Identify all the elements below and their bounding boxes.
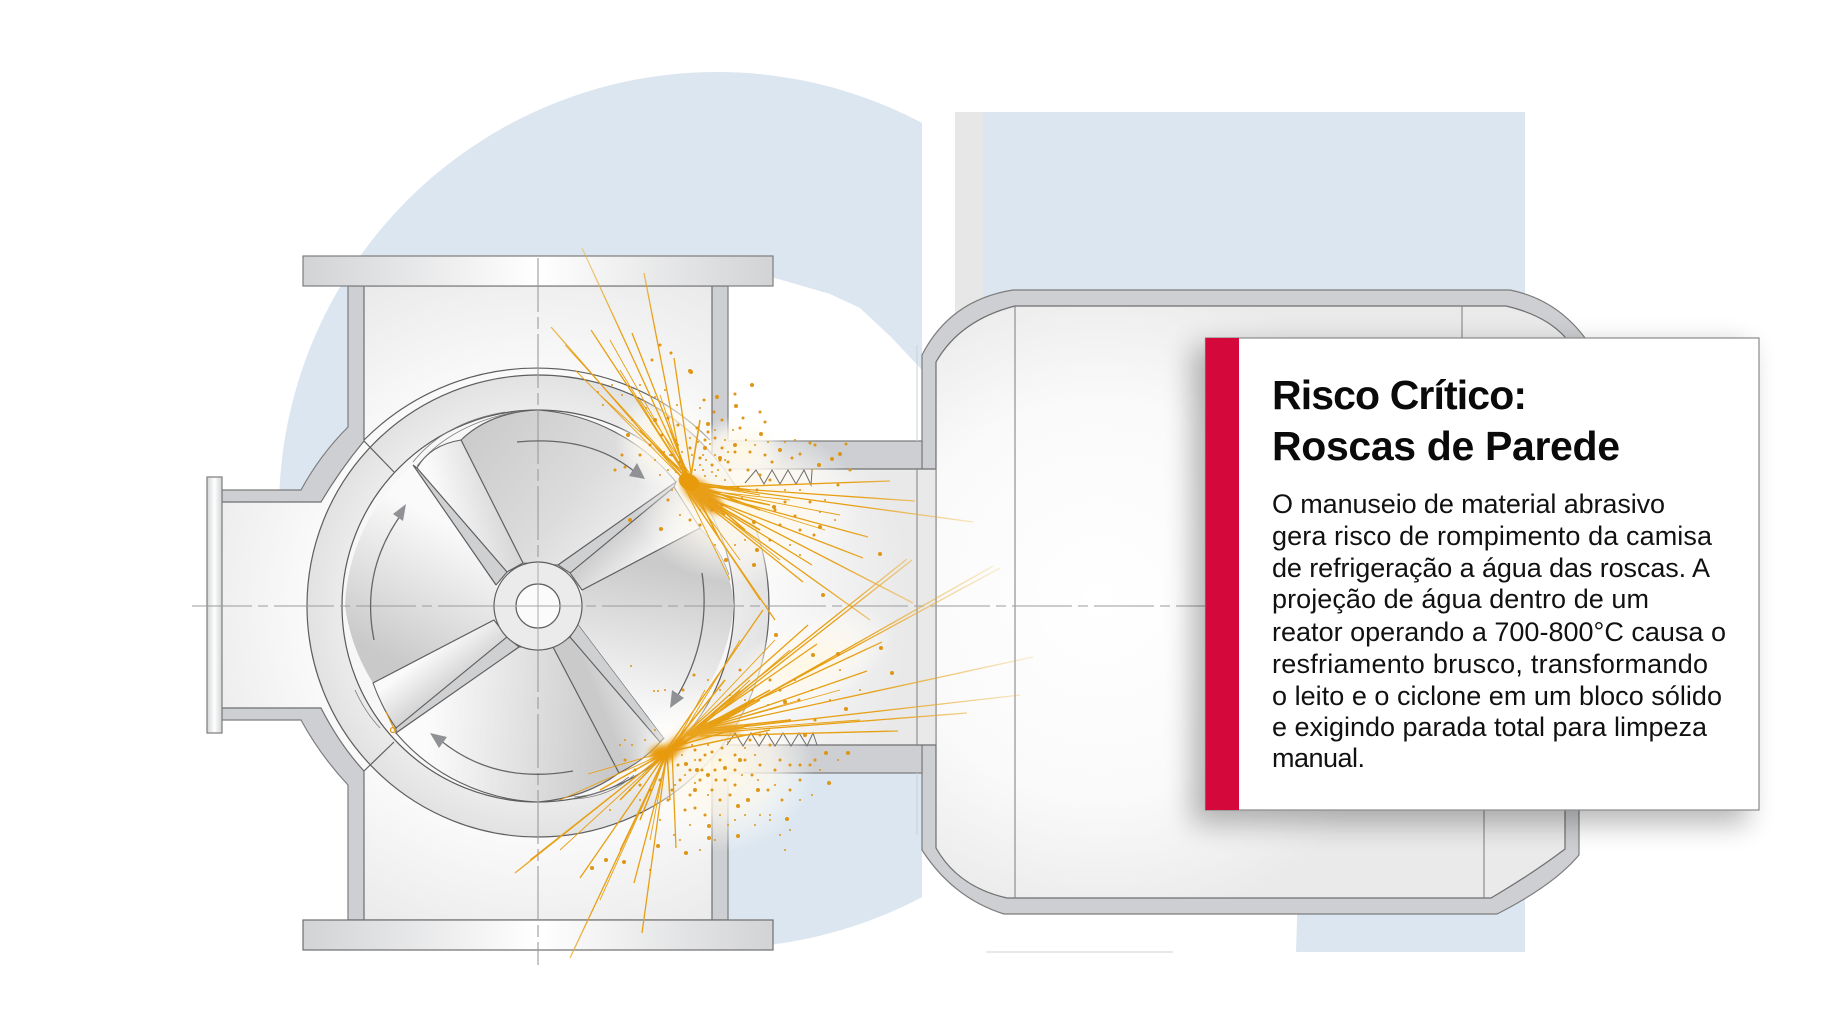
sparks: lower burst [515, 559, 1033, 958]
rotor casing rings [307, 368, 769, 837]
threads: wall thread zigzags [727, 470, 817, 746]
card body text [1272, 489, 1726, 773]
arrow: top [517, 441, 645, 479]
card body text: reator operando a 700-800°C causa o [1272, 617, 1726, 647]
background: blue circle shape [280, 72, 922, 944]
spark particles: left bearing spot [386, 712, 396, 733]
card body text: O manuseio de material abrasivo [1272, 489, 1665, 519]
background: blue rectangle block [955, 112, 1525, 953]
card heading: Risco Crítico: [1272, 372, 1527, 418]
spark particles: lower [592, 635, 892, 870]
rotation arrows [371, 441, 704, 774]
card body text: de refrigeração a água das roscas. A [1272, 553, 1710, 583]
flange: bottom [303, 920, 773, 950]
infographic canvas [192, 72, 1764, 965]
arrow: bottom [430, 733, 573, 774]
sparks: upper burst [551, 248, 973, 620]
accent: red bar [1206, 338, 1239, 810]
arrow: right [670, 573, 704, 708]
arrow: left [371, 504, 406, 640]
card heading: Roscas de Parede [1272, 423, 1620, 469]
pipe: cross housing walls [222, 286, 936, 920]
card body text: manual. [1272, 743, 1365, 773]
vessel: right reactor body [922, 290, 1590, 914]
card body text: gera risco de rompimento da camisa [1272, 521, 1713, 551]
centre lines [192, 258, 1206, 965]
card heading [1272, 372, 1620, 469]
card body text: o leito e o ciclone em um bloco sólido [1272, 681, 1722, 711]
card body text: projeção de água dentro de um [1272, 584, 1649, 614]
flange: left [207, 477, 222, 733]
card body text: e exigindo parada total para limpeza [1272, 712, 1708, 742]
spark particles: upper [598, 345, 880, 595]
card: risk callout [1206, 338, 1759, 810]
impeller hub [494, 562, 582, 650]
spark glow [615, 390, 910, 853]
impeller blades [345, 410, 734, 802]
card: risk panel shadow [1192, 346, 1748, 824]
flange: top [303, 256, 773, 286]
card body text: resfriamento brusco, transformando [1272, 649, 1708, 679]
